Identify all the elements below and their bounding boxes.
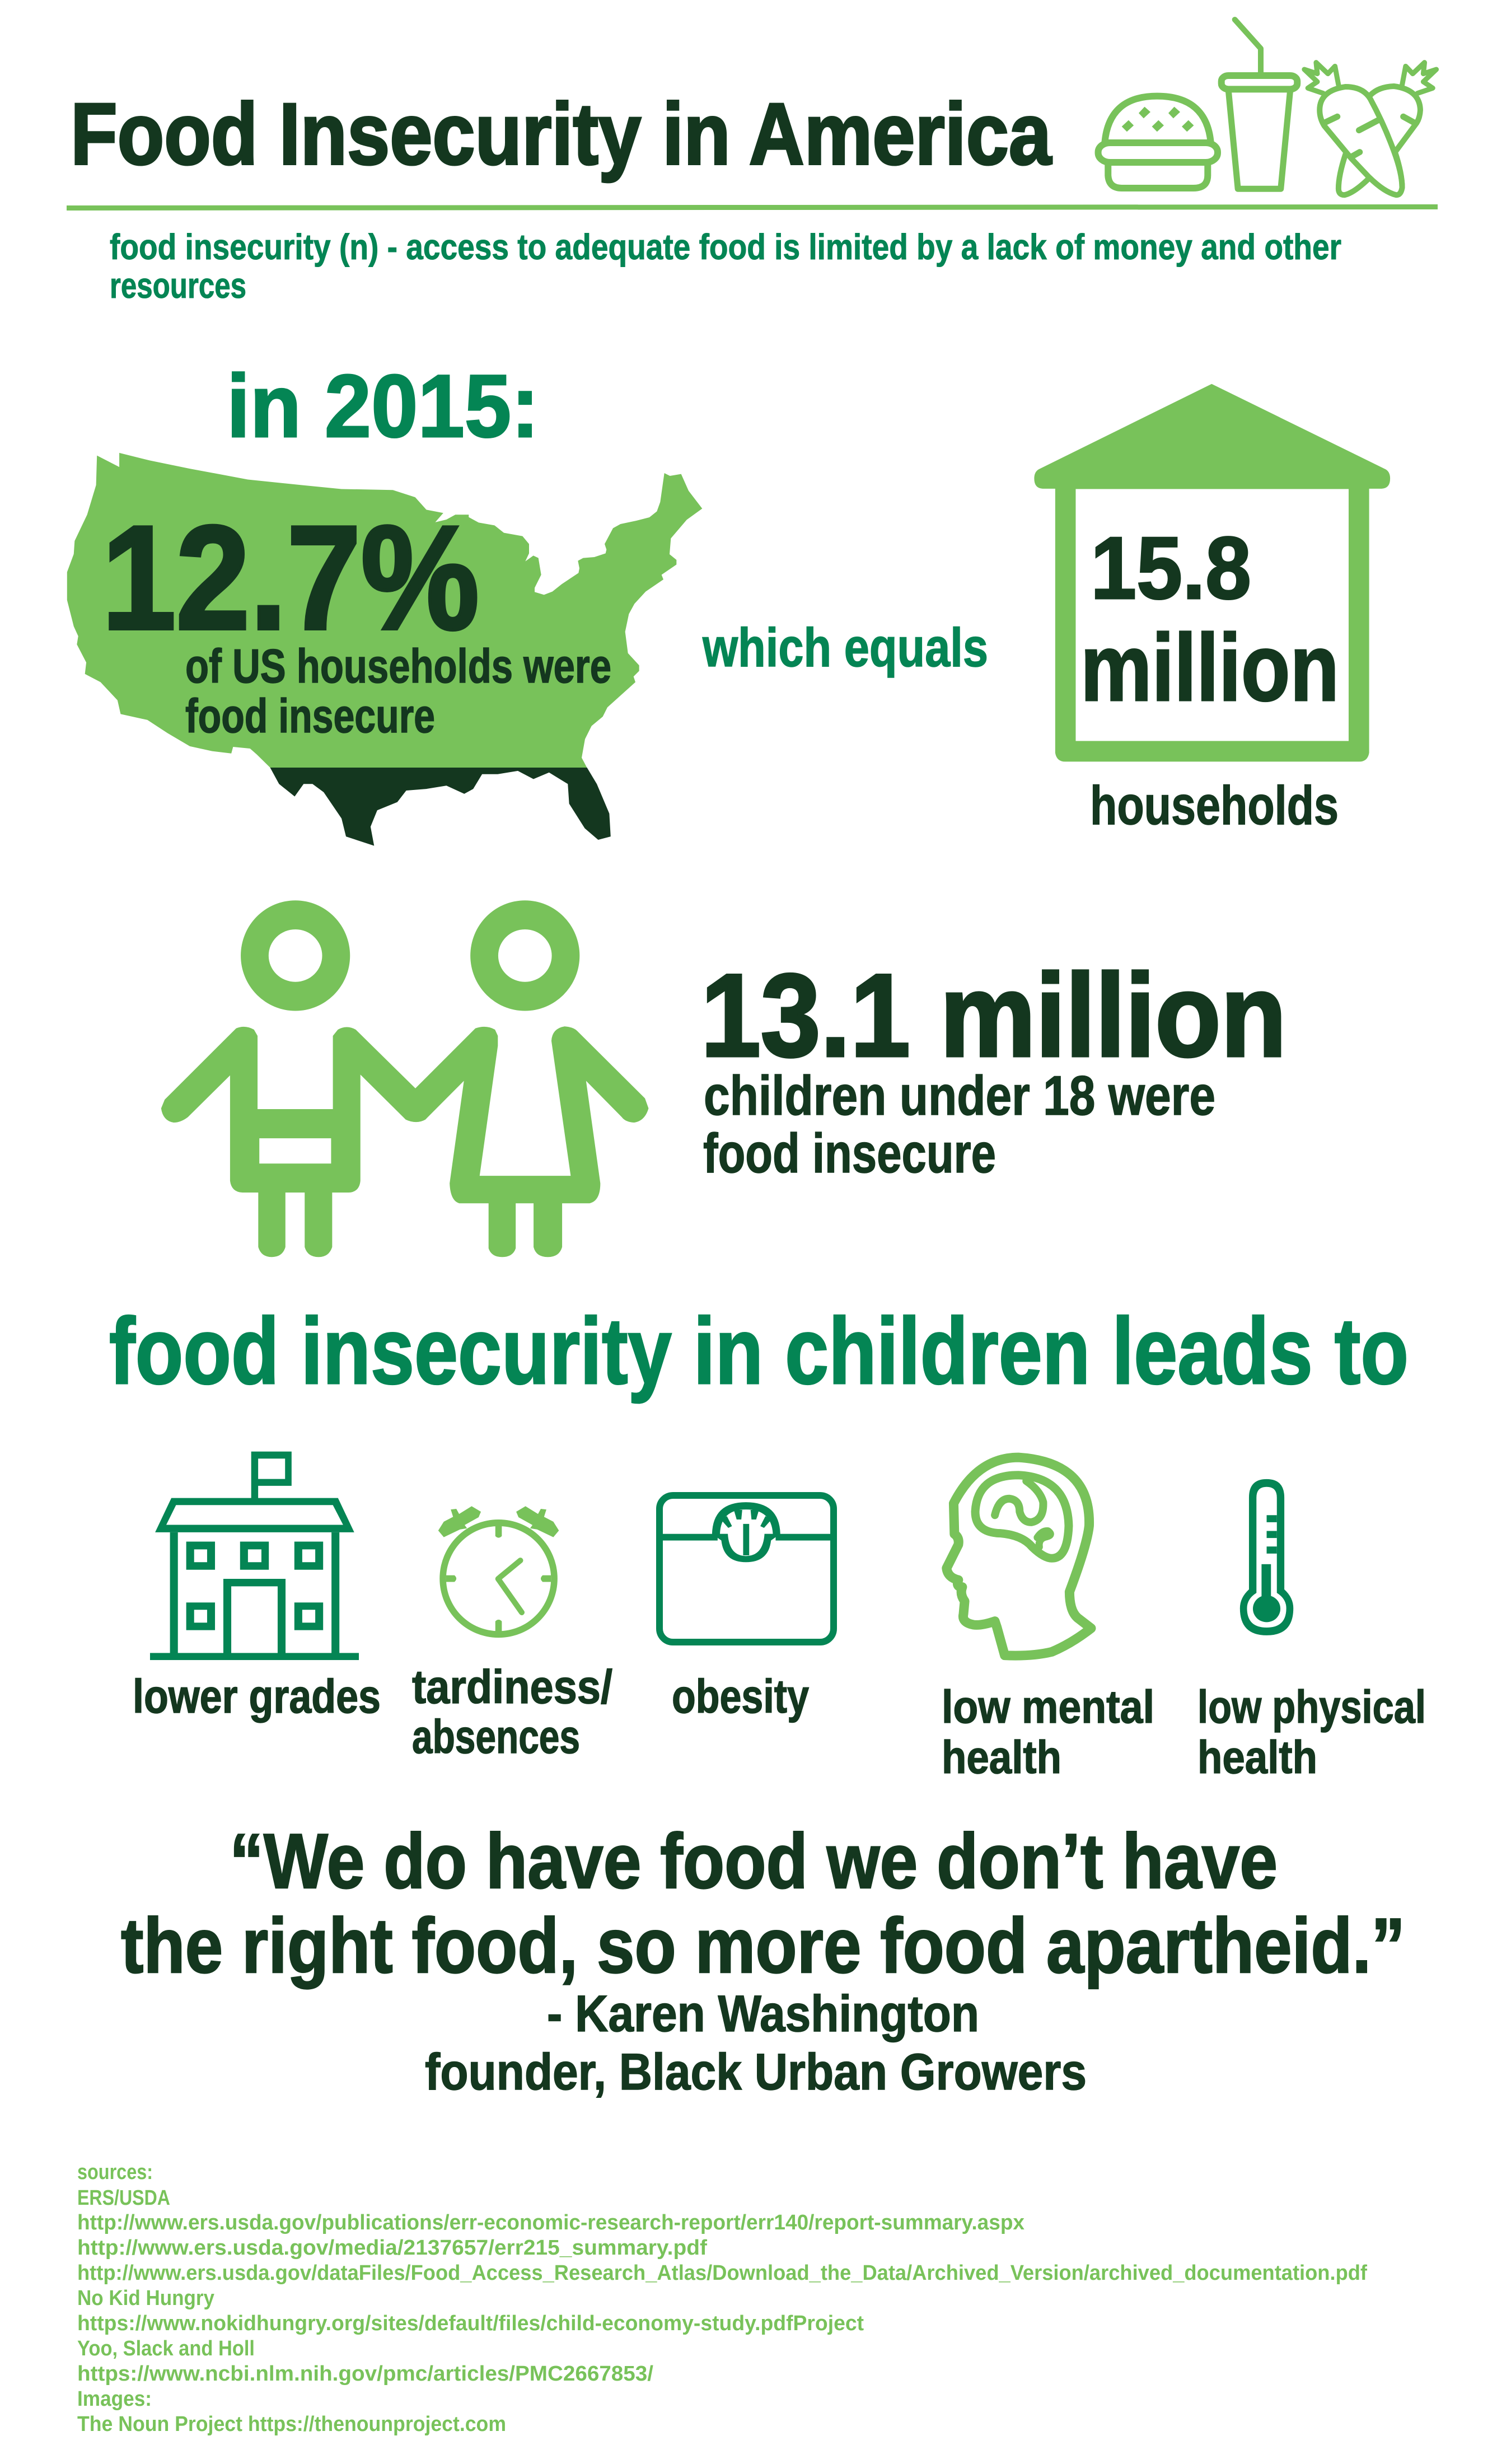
label: tardiness/absences: absences [412, 1710, 580, 1763]
sources: http://www.ers.usda.gov/media/2137657/err215_summary.pdf [77, 2236, 707, 2260]
label: low mental health: low mental [942, 1681, 1154, 1733]
sources: Yoo, Slack and Holl [77, 2337, 255, 2360]
icon: two children holding hands [161, 900, 648, 1257]
sources: http://www.ers.usda.gov/dataFiles/Food_Access_Research_Atlas/Download_the_Data/Archived_Version/archived_documentation.pdf [77, 2261, 1367, 2285]
sources: https://www.nokidhungry.org/sites/default/files/child-economy-study.pdfProject [77, 2312, 864, 2335]
text: which equals: which equals [702, 617, 988, 678]
label: low mental health [942, 1681, 1154, 1783]
text: children under 18 were food insecure [703, 1064, 1215, 1184]
label: obesity: obesity [672, 1670, 809, 1723]
quote attribution: - Karen Washington [547, 1985, 979, 2042]
map: eastern states [463, 473, 702, 768]
title: Food Insecurity in America [71, 86, 1052, 183]
sources: The Noun Project https://thenounproject.com [77, 2412, 506, 2436]
label: low physical health: low physical [1197, 1681, 1426, 1733]
icon: head with brain [947, 1457, 1091, 1656]
text: households: households [1090, 775, 1339, 836]
quote attribution: founder, Black Urban Growers [425, 2044, 1087, 2101]
icon: house [1034, 384, 1390, 761]
text: of US households were food insecure: of US households were [185, 640, 611, 693]
label: low physical health: health [1197, 1731, 1317, 1783]
label: low mental health: health [942, 1731, 1061, 1783]
text: children under 18 were food insecure: food insecure [703, 1122, 996, 1184]
sources: sources: [77, 2161, 153, 2184]
quote attribution [425, 1985, 1087, 2101]
sources [77, 2161, 1367, 2436]
sources: https://www.ncbi.nlm.nih.gov/pmc/articles/PMC2667853/ [77, 2362, 653, 2386]
text: of US households were food insecure [185, 640, 611, 743]
statistic: 15.8 million: 15.8 [1091, 519, 1251, 618]
sources: Images: [77, 2387, 152, 2411]
label: tardiness/absences [412, 1661, 612, 1763]
definition text: resources [110, 265, 246, 306]
statistic: 15.8 million: million [1080, 615, 1339, 721]
sources: No Kid Hungry [77, 2287, 214, 2310]
icon: drink cup [1222, 20, 1297, 189]
quote: “We do have food we don’t have [230, 1818, 1278, 1905]
icon: bathroom scale [659, 1495, 834, 1642]
icon: thermometer [1240, 1479, 1293, 1635]
sources: ERS/USDA [77, 2186, 170, 2210]
icon: carrots [1304, 63, 1437, 195]
label: lower grades: lower grades [133, 1670, 381, 1723]
map: United States [67, 453, 702, 846]
statistic: 12.7%: 12.7% [102, 495, 479, 660]
definition text [110, 227, 1341, 306]
text: children under 18 were food insecure: children under 18 were [704, 1064, 1215, 1126]
heading: in 2015: in 2015: [227, 356, 539, 456]
label: low physical health [1197, 1681, 1426, 1783]
statistic: 13.1 million: 13.1 million [701, 950, 1287, 1081]
map: western and central states [67, 453, 611, 846]
icon: burger, drink and carrots [1098, 20, 1437, 195]
icon: alarm clock [438, 1506, 559, 1638]
icon: school [150, 1452, 359, 1660]
quote [121, 1818, 1405, 1989]
sources: http://www.ers.usda.gov/publications/err-economic-research-report/err140/report-summary.aspx [77, 2211, 1024, 2234]
label: tardiness/absences: tardiness/ [412, 1661, 612, 1713]
icon: burger [1098, 96, 1218, 188]
statistic: 15.8 million [1080, 519, 1339, 721]
text: of US households were food insecure: food insecure [185, 690, 435, 743]
